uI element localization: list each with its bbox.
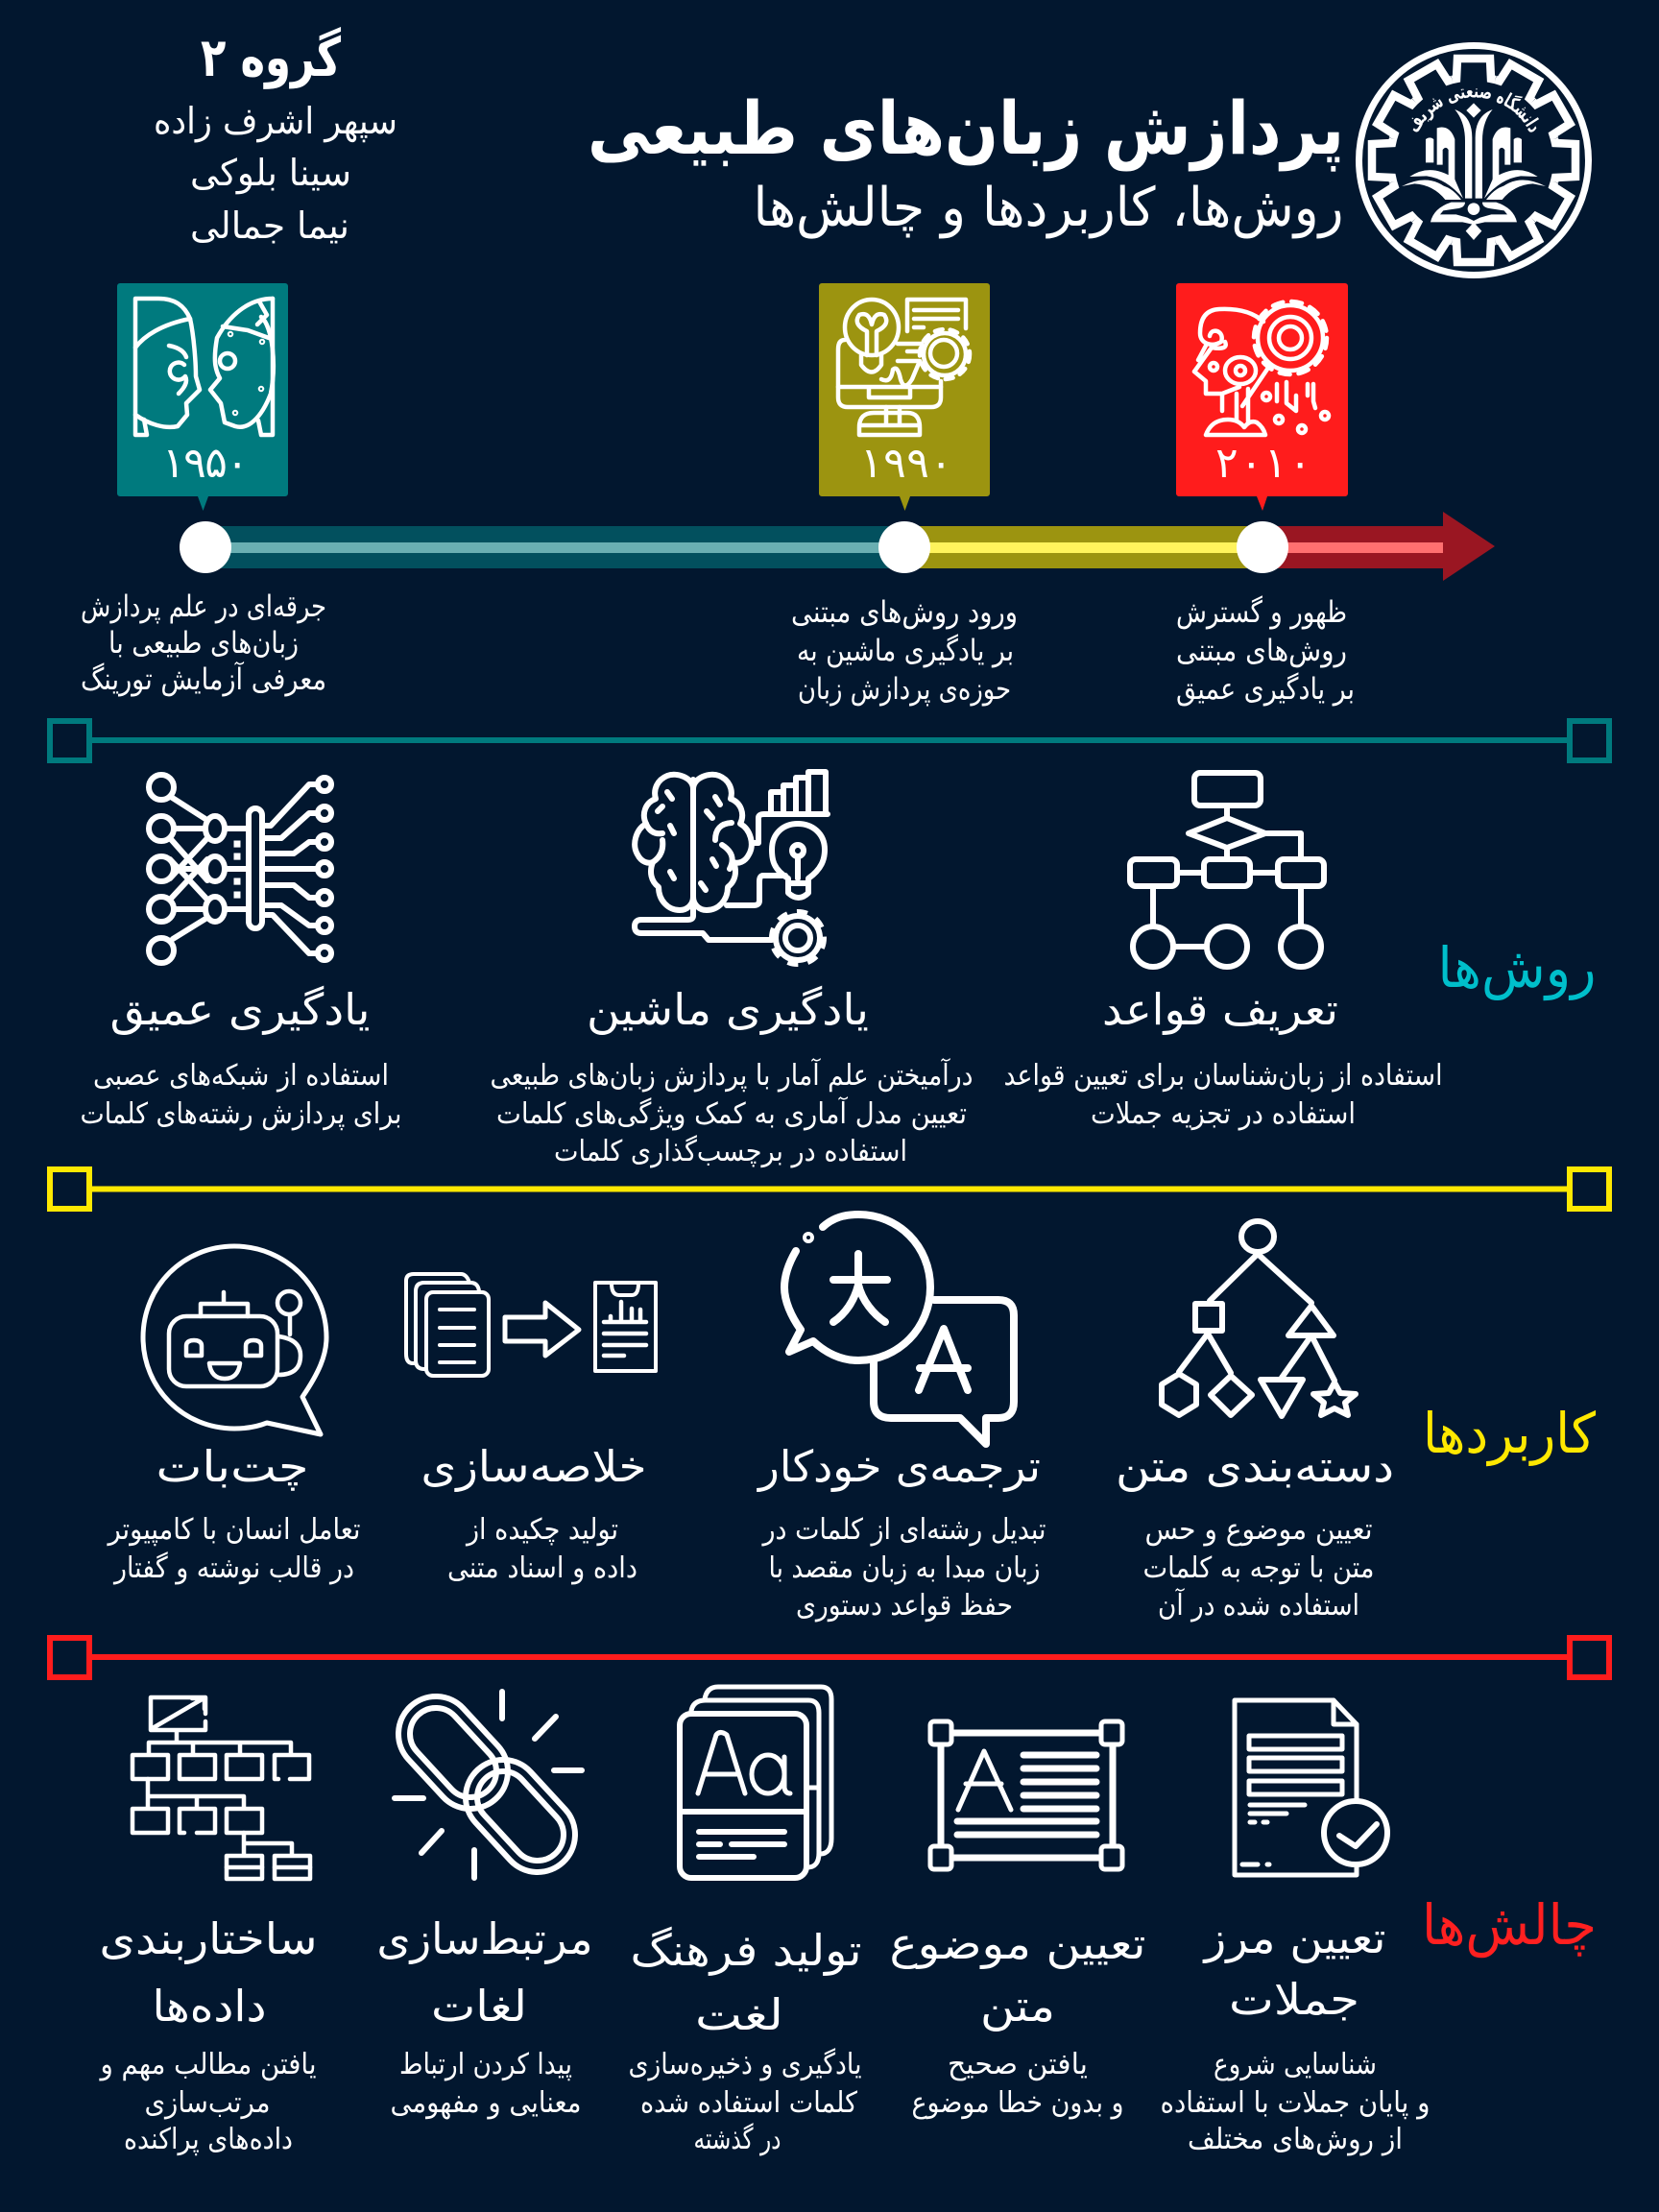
milestone text 2010 <box>1176 595 1355 707</box>
challenge: structuring data: داده‌ها <box>152 1981 267 2032</box>
challenge: building dictionary: تولید فرهنگ <box>630 1925 862 1976</box>
milestone text 1990: بر یادگیری ماشین به <box>797 634 1014 668</box>
icon: document check <box>1235 1700 1387 1875</box>
group credits: سپهر اشرف زاده <box>154 100 397 143</box>
milestone card 2010 <box>1176 283 1348 511</box>
milestone text 1950 <box>81 589 326 697</box>
application: machine translation: ترجمه‌ی خودکار <box>757 1441 1041 1492</box>
icon: summarization <box>406 1274 656 1376</box>
challenge: building dictionary: در گذشته <box>693 2123 781 2156</box>
challenge: topic detection: متن <box>980 1981 1055 2032</box>
icon: rules flowchart <box>1130 773 1324 967</box>
panel: challenges <box>99 1681 1597 2156</box>
milestone 1950 dot <box>180 521 231 573</box>
milestone text 2010: ظهور و گسترش <box>1176 595 1347 630</box>
milestone text 1990 <box>791 595 1018 707</box>
application: summarization: خلاصه‌سازی <box>421 1441 647 1492</box>
section label: applications: کاربردها <box>1423 1401 1596 1467</box>
method: deep learning: برای پردازش رشته‌های کلمات <box>81 1097 401 1131</box>
application: text classification: تعیین موضوع و حس <box>1144 1513 1373 1547</box>
challenge: topic detection <box>889 1918 1146 2120</box>
milestone text 2010: بر یادگیری عمیق <box>1176 672 1355 707</box>
icon: chain link <box>383 1681 590 1887</box>
application: text classification: استفاده شده در آن <box>1158 1588 1359 1623</box>
challenge: building dictionary: لغت <box>695 1989 783 2040</box>
challenge: structuring data <box>99 1913 317 2156</box>
title: پردازش زبان‌های طبیعی <box>588 85 1344 172</box>
challenge: sentence boundary: و پایان جملات با استفاده <box>1160 2086 1431 2120</box>
method: deep learning: یادگیری عمیق <box>109 984 371 1035</box>
challenge: linking words: مرتبط‌سازی <box>376 1913 593 1964</box>
panel: applications <box>107 1214 1596 1623</box>
panel: methods <box>81 772 1596 1168</box>
challenge: sentence boundary: تعیین مرز <box>1202 1912 1386 1963</box>
challenge: linking words <box>376 1913 593 2120</box>
application: summarization: تولید چکیده از <box>465 1513 618 1547</box>
icon: bulb, key and monitor <box>838 300 970 435</box>
challenge: topic detection: یافتن صحیح <box>948 2048 1088 2081</box>
challenge: structuring data: داده‌های پراکنده <box>124 2123 293 2156</box>
method: machine learning <box>490 984 974 1168</box>
challenge: sentence boundary: شناسایی شروع <box>1214 2048 1377 2081</box>
milestone text 1990: حوزه‌ی پردازش زبان <box>798 672 1011 707</box>
section divider: applications <box>50 1169 1609 1209</box>
section divider: challenges <box>50 1638 1609 1677</box>
icon: translation bubbles <box>784 1214 1014 1444</box>
icon: two faces <box>135 299 274 435</box>
application: machine translation <box>757 1441 1046 1623</box>
method: machine learning: درآمیختن علم آمار با پردازش زبان‌های طبیعی <box>490 1058 974 1093</box>
year: ۱۹۵۰ <box>162 439 249 488</box>
application: chatbot: در قالب نوشته و گفتار <box>112 1551 354 1585</box>
method: machine learning: استفاده در برچسب‌گذاری کلمات <box>554 1135 907 1168</box>
icon: chatbot <box>143 1246 326 1434</box>
application: summarization <box>421 1441 647 1585</box>
milestone text 1950: زبان‌های طبیعی با <box>108 626 299 661</box>
milestone 1990 dot <box>878 521 930 573</box>
method: rule definition: استفاده از زبان‌شناسان برای تعیین قواعد <box>1004 1059 1442 1093</box>
method: machine learning: یادگیری ماشین <box>587 984 869 1035</box>
application: machine translation: حفظ قواعد دستوری <box>796 1589 1013 1623</box>
challenge: sentence boundary: از روش‌های مختلف <box>1188 2123 1403 2156</box>
challenge: sentence boundary: جملات <box>1229 1974 1359 2025</box>
milestone card 1950 <box>117 283 288 511</box>
challenge: topic detection: تعیین موضوع <box>889 1918 1146 1969</box>
group credits: نیما جمالی <box>190 204 349 247</box>
milestone text 2010: روش‌های مبتنی <box>1176 634 1347 668</box>
icon: data hierarchy <box>132 1697 310 1879</box>
challenge: structuring data: ساختاربندی <box>100 1913 317 1964</box>
challenge: linking words: پیدا کردن ارتباط <box>399 2048 572 2081</box>
icon: machine learning brain <box>635 772 828 964</box>
group credits: گروه ۲ <box>201 27 341 89</box>
method: deep learning <box>81 984 401 1131</box>
challenge: linking words: لغات <box>431 1981 527 2032</box>
icon: classification tree <box>1162 1221 1356 1416</box>
challenge: building dictionary <box>628 1925 862 2156</box>
group credits <box>154 27 397 247</box>
challenge: structuring data: یافتن مطالب مهم و <box>99 2048 316 2081</box>
method: deep learning: استفاده از شبکه‌های عصبی <box>93 1059 389 1093</box>
application: machine translation: زبان مبدا به زبان مقصد با <box>768 1551 1041 1585</box>
challenge: building dictionary: یادگیری و ذخیره‌سازی <box>628 2048 862 2081</box>
method: machine learning: تعیین مدل آماری به کمک ویژگی‌های کلمات <box>496 1096 967 1131</box>
challenge: structuring data: مرتب‌سازی <box>144 2086 271 2120</box>
icon: text frame <box>930 1721 1122 1869</box>
section label: challenges: چالش‌ها <box>1422 1892 1597 1958</box>
application: text classification <box>1116 1441 1394 1623</box>
icon: university logo: دانشگاه صنعتی شریف <box>1411 88 1539 132</box>
challenge: sentence boundary <box>1160 1912 1431 2156</box>
application: machine translation: تبدیل رشته‌ای از کلمات در <box>761 1513 1046 1547</box>
application: chatbot <box>107 1441 361 1585</box>
icon: dictionary books <box>680 1687 831 1878</box>
milestone text 1950: جرقه‌ای در علم پردازش <box>81 589 326 624</box>
challenge: linking words: معنایی و مفهومی <box>390 2086 582 2120</box>
application: text classification: متن با توجه به کلمات <box>1142 1551 1375 1585</box>
group credits: سینا بلوکی <box>190 152 351 195</box>
method: rule definition: استفاده در تجزیه جملات <box>1091 1097 1356 1131</box>
application: chatbot: چت‌بات <box>156 1441 309 1492</box>
method: rule definition <box>1004 984 1442 1131</box>
challenge: building dictionary: کلمات استفاده شده <box>640 2086 858 2120</box>
application: chatbot: تعامل انسان با کامپیوتر <box>107 1513 361 1547</box>
milestone card 1990 <box>819 283 990 511</box>
challenge: topic detection: و بدون خطا موضوع <box>912 2086 1123 2120</box>
section divider: methods <box>50 721 1609 760</box>
application: summarization: داده و اسناد متنی <box>447 1551 637 1585</box>
timeline bar <box>205 526 1443 568</box>
milestone 2010 dot <box>1237 521 1288 573</box>
year: ۲۰۱۰ <box>1215 439 1311 488</box>
icon: robot head and gear <box>1194 301 1329 435</box>
icon: university logo <box>1356 42 1592 278</box>
subtitle: روش‌ها، کاربردها و چالش‌ها <box>753 177 1344 239</box>
milestone text 1990: ورود روش‌های مبتنی <box>791 595 1018 630</box>
section label: methods: روش‌ها <box>1438 935 1596 1001</box>
icon: deep learning network <box>149 775 331 963</box>
application: text classification: دسته‌بندی متن <box>1116 1441 1394 1492</box>
year: ۱۹۹۰ <box>860 439 952 488</box>
arrow head <box>1443 512 1495 581</box>
method: rule definition: تعریف قواعد <box>1102 984 1338 1035</box>
milestone text 1950: معرفی آزمایش تورینگ <box>81 661 326 697</box>
